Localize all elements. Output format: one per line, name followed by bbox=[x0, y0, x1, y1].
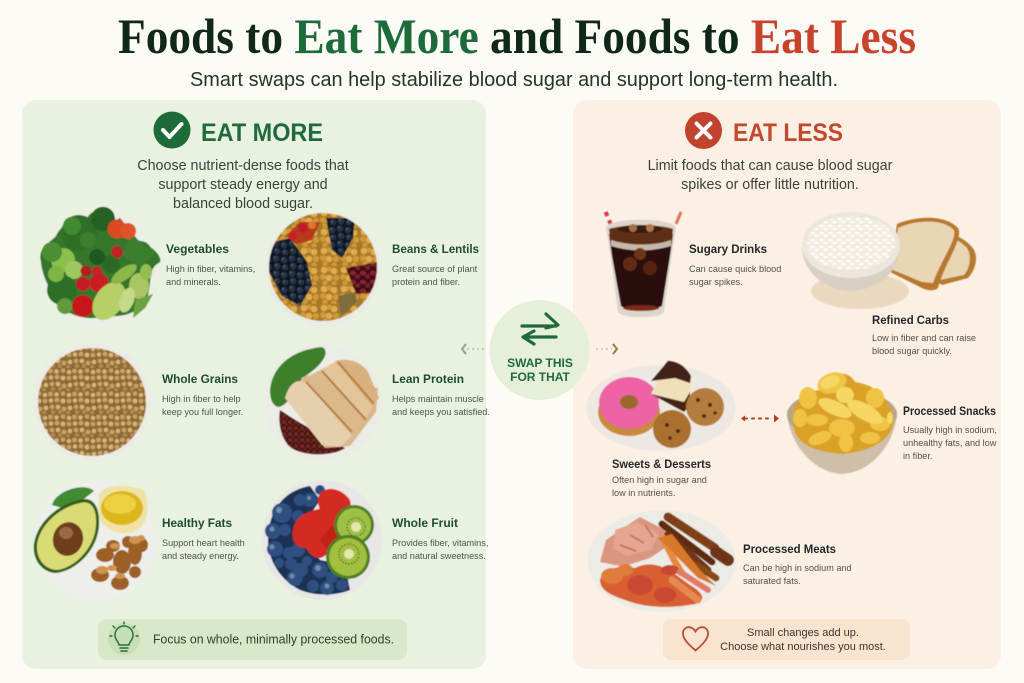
text: lean protein: Helps maintain muscle bbox=[392, 394, 484, 404]
panel: eat more bbox=[22, 100, 490, 669]
swap label: SWAP THIS bbox=[507, 356, 573, 370]
food: processed meats plate bbox=[588, 510, 736, 612]
food: sugary drink glass bbox=[604, 208, 681, 317]
text: whole grains bbox=[162, 372, 243, 417]
text: processed meats: Processed Meats bbox=[743, 542, 836, 556]
text: vegetables: Vegetables bbox=[166, 242, 229, 256]
eat less x icon bbox=[685, 112, 722, 149]
text: sugary drinks: Can cause quick blood bbox=[689, 264, 781, 274]
eat less intro: spikes or offer little nutrition. bbox=[681, 177, 859, 193]
text: processed snacks: unhealthy fats, and low bbox=[903, 438, 997, 448]
text: vegetables: High in fiber, vitamins, bbox=[166, 264, 255, 274]
text: refined carbs: Low in fiber and can raise bbox=[872, 333, 976, 343]
text: whole fruit: Whole Fruit bbox=[392, 516, 458, 530]
arrow: swap to eat less bbox=[596, 344, 617, 354]
text: sweets and desserts: low in nutrients. bbox=[612, 488, 675, 498]
text: healthy fats bbox=[162, 516, 245, 561]
text: healthy fats: and steady energy. bbox=[162, 551, 239, 561]
food: lean protein plate bbox=[264, 344, 382, 462]
text: whole grains: Whole Grains bbox=[162, 372, 238, 386]
text: lean protein: Lean Protein bbox=[392, 372, 464, 386]
icon: swap arrows bbox=[522, 314, 558, 344]
food: whole fruit bowl bbox=[262, 480, 382, 600]
text: sugary drinks bbox=[689, 242, 781, 287]
text: sweets and desserts: Often high in sugar and bbox=[612, 475, 707, 485]
eat more intro: balanced blood sugar. bbox=[173, 196, 313, 212]
text: processed meats: Can be high in sodium and bbox=[743, 563, 852, 573]
eat less intro: Limit foods that can cause blood sugar bbox=[648, 158, 893, 174]
food: healthy fats plate bbox=[34, 479, 156, 601]
swap badge bbox=[490, 300, 590, 400]
text: sweets and desserts: Sweets & Desserts bbox=[612, 457, 711, 471]
eat more intro: Choose nutrient-dense foods that bbox=[137, 158, 349, 174]
text: healthy fats: Support heart health bbox=[162, 538, 245, 548]
text: processed meats: saturated fats. bbox=[743, 576, 801, 586]
text: beans and lentils bbox=[392, 242, 479, 287]
text: processed snacks: in fiber. bbox=[903, 451, 932, 461]
text: processed snacks: Usually high in sodium, bbox=[903, 425, 997, 435]
text: sugary drinks: Sugary Drinks bbox=[689, 242, 767, 256]
food: whole grains bowl bbox=[33, 343, 151, 461]
tip text: Small changes add up. bbox=[747, 627, 859, 639]
tip text: Choose what nourishes you most. bbox=[720, 641, 886, 653]
eat more intro: support steady energy and bbox=[158, 177, 328, 193]
arrow: swap to eat more bbox=[462, 344, 486, 354]
text: processed meats bbox=[743, 542, 852, 586]
icon: light bulb bbox=[108, 622, 140, 655]
text: healthy fats: Healthy Fats bbox=[162, 516, 232, 530]
eat less heading: EAT LESS bbox=[733, 119, 843, 147]
text: whole fruit bbox=[392, 516, 488, 561]
tip text: Focus on whole, minimally processed foods. bbox=[153, 632, 394, 646]
panel: eat less bbox=[573, 100, 1001, 669]
tip bar: small changes bbox=[663, 619, 910, 660]
text: refined carbs: blood sugar quickly. bbox=[872, 346, 952, 356]
text: beans and lentils: protein and fiber. bbox=[392, 277, 460, 287]
text: lean protein: and keeps you satisfied. bbox=[392, 407, 490, 417]
text: processed snacks: Processed Snacks bbox=[903, 404, 996, 418]
subtitle: Smart swaps can help stabilize blood sugar and support long-term health. bbox=[190, 69, 838, 91]
icon: heart bbox=[683, 627, 708, 650]
swap label: FOR THAT bbox=[510, 370, 571, 384]
text: beans and lentils: Great source of plant bbox=[392, 264, 478, 274]
eat more check icon bbox=[154, 112, 190, 148]
text: vegetables bbox=[166, 242, 255, 287]
text: sweets and desserts bbox=[612, 457, 711, 498]
text: sugary drinks: sugar spikes. bbox=[689, 277, 743, 287]
text: lean protein bbox=[392, 372, 490, 417]
text: processed snacks bbox=[903, 404, 997, 461]
food: processed snacks chips bowl bbox=[787, 368, 897, 474]
food: rice bowl and bread bbox=[802, 212, 976, 309]
text: refined carbs: Refined Carbs bbox=[872, 313, 949, 327]
food: vegetables plate bbox=[40, 207, 160, 327]
text: whole grains: High in fiber to help bbox=[162, 394, 241, 404]
food: sweets and desserts plate bbox=[586, 361, 736, 451]
food: beans and lentils bowl bbox=[266, 212, 380, 327]
text: refined carbs bbox=[872, 313, 976, 356]
eat more heading: EAT MORE bbox=[201, 119, 323, 147]
text: vegetables: and minerals. bbox=[166, 277, 221, 287]
arrow: sweets to snacks bbox=[741, 414, 779, 422]
tip bar: focus on whole foods bbox=[98, 619, 407, 660]
title: Foods to Eat More and Foods to Eat Less bbox=[118, 8, 916, 64]
text: whole grains: keep you full longer. bbox=[162, 407, 243, 417]
text: whole fruit: Provides fiber, vitamins, bbox=[392, 538, 488, 548]
text: whole fruit: and natural sweetness. bbox=[392, 551, 486, 561]
text: beans and lentils: Beans & Lentils bbox=[392, 242, 479, 256]
